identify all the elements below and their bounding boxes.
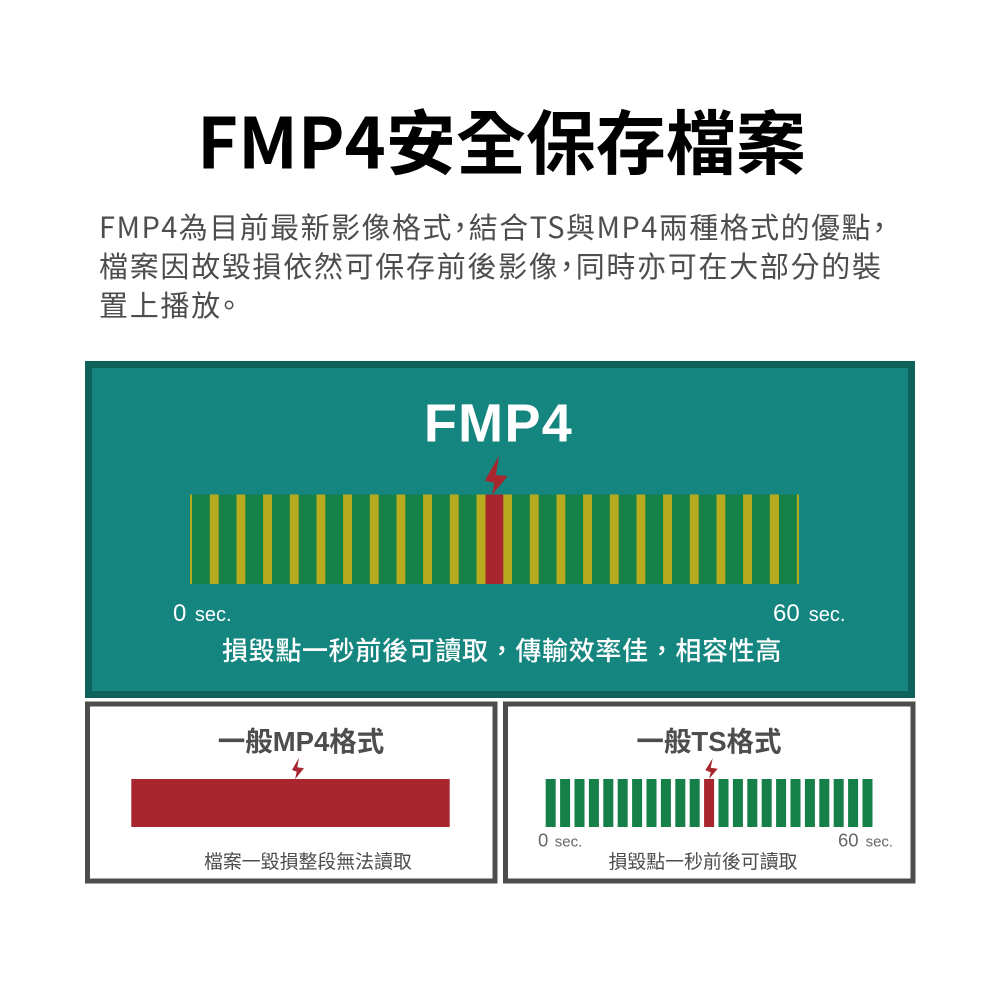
panel caption: 損毀點一秒前後可讀取，傳輸效率佳，相容性高	[222, 631, 782, 668]
solid damaged bar	[131, 779, 450, 827]
panel heading: 一般TS格式	[636, 726, 782, 757]
panel background	[88, 364, 912, 694]
title: FMP4安全保存檔案	[197, 88, 806, 190]
panel heading: 一般MP4格式	[218, 726, 384, 757]
icon: lightning bolt	[292, 758, 304, 779]
panel frame	[506, 704, 913, 881]
axis label: 60 sec: 60 sec.	[838, 830, 893, 850]
axis label: 0 sec: 0 sec.	[173, 600, 232, 627]
intro text block: FMP4為目前最新影像格式，結合TS與MP4兩種格式的優點，	[99, 205, 888, 247]
axis label: 60 sec: 60 sec.	[773, 600, 845, 627]
panel caption: 檔案一毀損整段無法讀取	[204, 847, 412, 874]
FMP4 segment bar	[190, 494, 799, 584]
panel frame	[88, 704, 495, 881]
icon: lightning bolt	[705, 758, 718, 779]
panel heading: FMP4	[424, 394, 573, 454]
panel: TS	[506, 704, 913, 881]
intro text block	[99, 205, 888, 325]
panel caption: 損毀點一秒前後可讀取	[608, 847, 798, 874]
axis label: 0 sec: 0 sec.	[538, 830, 582, 850]
TS segment bar	[546, 779, 872, 827]
panel: FMP4	[88, 364, 912, 694]
intro text block: 置上播放。	[99, 283, 238, 325]
intro text block: 檔案因故毀損依然可保存前後影像，同時亦可在大部分的裝	[99, 244, 883, 286]
panel: MP4	[88, 704, 495, 881]
icon: lightning bolt	[485, 456, 508, 495]
